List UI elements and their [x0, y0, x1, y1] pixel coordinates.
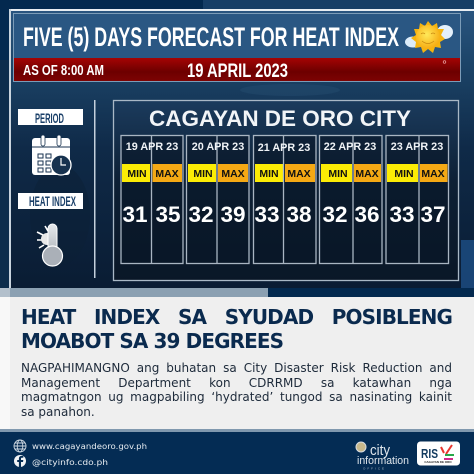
day: 19 Apr: MAX — [155, 168, 179, 180]
icon: thermometer — [37, 224, 62, 266]
logo: RIS: RIS — [421, 446, 438, 461]
icon: calendar — [32, 135, 71, 175]
red date bar: AS OF 8:00 AM — [23, 62, 104, 79]
icon: globe — [14, 440, 26, 452]
day: 22 Apr: 22 APR 23 — [324, 141, 376, 153]
day: 23 Apr: 33 — [389, 202, 415, 227]
panel: left legend — [18, 109, 83, 266]
header box — [14, 14, 460, 82]
day: 21 Apr — [254, 136, 316, 264]
footer — [0, 429, 474, 474]
city heading: CAGAYAN DE ORO CITY — [149, 106, 411, 131]
day: 23 Apr: 37 — [420, 202, 446, 227]
day: 23 Apr — [386, 136, 448, 264]
day: 21 Apr: 21 APR 23 — [258, 142, 310, 154]
day: 21 Apr: 33 — [254, 202, 280, 227]
day: 19 Apr — [121, 136, 183, 264]
label: period: PERIOD — [35, 110, 64, 126]
logo: city information office: information — [357, 455, 409, 467]
background — [0, 0, 474, 297]
body line 3: magmatngon ug magpabiling ‘hydrated’ tungod sa nasinating kainit — [21, 390, 452, 404]
day: 20 Apr: MIN — [193, 168, 213, 180]
day: 23 Apr: MIN — [394, 168, 414, 180]
day: 22 Apr: MIN — [328, 168, 348, 180]
day: 20 Apr: MAX — [221, 168, 245, 180]
logo: RIS — [417, 442, 460, 466]
icon: facebook — [14, 455, 26, 467]
panel: city forecast — [114, 100, 458, 280]
facebook handle: @cityinfo.cdo.ph — [32, 457, 108, 467]
day: 22 Apr: 36 — [354, 202, 380, 227]
article background — [0, 297, 474, 430]
day: 23 Apr: MAX — [421, 168, 445, 180]
body line 1: NAGPAHIMANGNO ang buhatan sa City Disaster Risk Reduction and — [21, 361, 452, 375]
red date bar — [14, 58, 460, 82]
day: 19 Apr: 31 — [122, 202, 148, 227]
day: 19 Apr: MIN — [127, 168, 147, 180]
day: 21 Apr: MIN — [259, 168, 279, 180]
logo: city information office: OFFICE — [363, 466, 386, 470]
body line 2: Management Department kon CDRRMD sa katawhan nga — [21, 376, 452, 390]
day: 23 Apr: 23 APR 23 — [391, 141, 443, 153]
day: 20 Apr — [186, 136, 249, 264]
day: 22 Apr: 32 — [322, 202, 348, 227]
heading line 1: HEAT INDEX SA SYUDAD POSIBLENG — [21, 305, 452, 329]
body line 4: sa panahon. — [21, 405, 95, 419]
red date bar: 19 APRIL 2023 — [187, 60, 288, 82]
website: www.cagayandeoro.gov.ph — [32, 441, 147, 451]
label: heat index: HEAT INDEX — [29, 193, 76, 209]
day: 21 Apr: 38 — [286, 202, 312, 227]
article text — [21, 305, 452, 419]
logo: city information office: city — [370, 442, 390, 459]
day: 20 Apr: 20 APR 23 — [192, 141, 244, 153]
day: 21 Apr: MAX — [287, 168, 311, 180]
day: 20 Apr: 39 — [220, 202, 246, 227]
day: 22 Apr — [320, 136, 382, 264]
label: period — [18, 109, 83, 126]
divider — [94, 100, 96, 278]
label: heat index — [18, 193, 83, 209]
heading line 2: MOABOT SA 39 DEGREES — [21, 329, 283, 353]
day: 19 Apr: 19 APR 23 — [126, 141, 178, 153]
day: 19 Apr: 35 — [155, 202, 181, 227]
day: 20 Apr: 32 — [188, 202, 214, 227]
icon: sun with clouds — [405, 21, 453, 53]
bottom accent bar — [0, 288, 474, 297]
day: 22 Apr: MAX — [355, 168, 379, 180]
logo: RIS: CAGAYAN DE ORO — [424, 460, 452, 464]
logo: city information office — [356, 442, 409, 470]
